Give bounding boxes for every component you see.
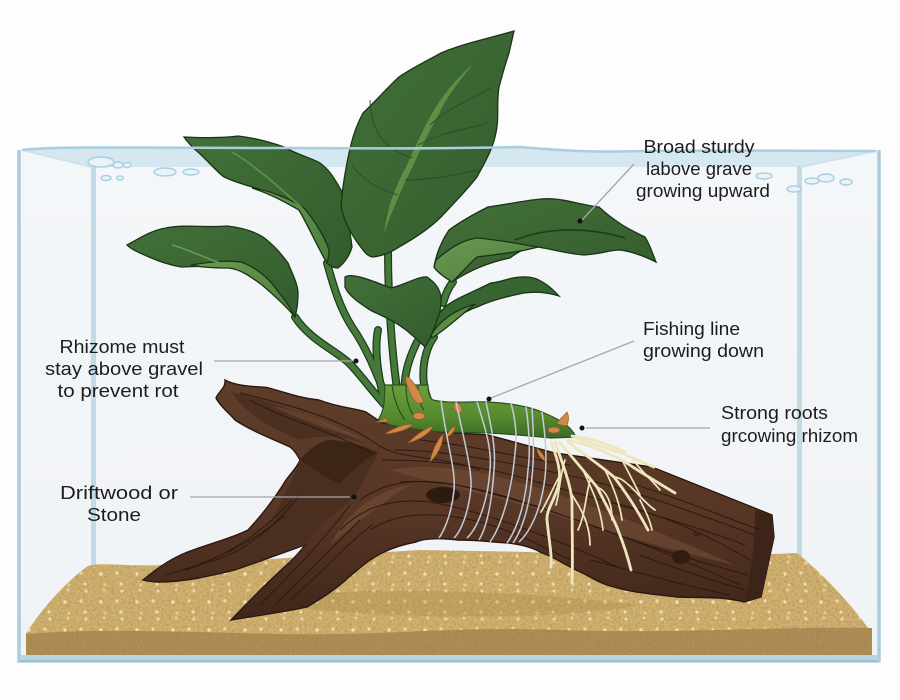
- water surface band: [22, 148, 876, 167]
- label: rhizome: to prevent rot: [58, 380, 178, 401]
- leaf: top large: [341, 31, 514, 257]
- gravel shaded patches: [250, 591, 640, 616]
- label: fishing line: Fishing line: [643, 318, 740, 339]
- driftwood: [143, 380, 774, 620]
- fishing line: [439, 400, 546, 543]
- label: driftwood: [60, 482, 356, 525]
- leaf: right large: [434, 199, 656, 282]
- label: rhizome: stay above gravel: [45, 358, 203, 379]
- bubbles left: [88, 157, 199, 180]
- rhizome: [378, 385, 576, 438]
- tank outer glass: [19, 150, 879, 661]
- label: rhizome: Rhizome must: [60, 336, 184, 357]
- label: rhizome: [45, 336, 358, 401]
- tank bottom rail: [20, 655, 878, 662]
- panel: aquarium tank: [19, 148, 879, 661]
- label: broad sturdy leaves: growing upward: [636, 180, 770, 201]
- wood end grain: [744, 510, 774, 602]
- label: strong roots: Strong roots: [721, 402, 828, 423]
- leader: rhizome: [214, 358, 358, 364]
- leaf: lower centre: [345, 276, 441, 347]
- gravel substrate: [26, 550, 872, 656]
- orange root nubs: [376, 376, 569, 462]
- bubbles right: [756, 173, 852, 192]
- leaf: upper left: [184, 136, 352, 268]
- wood highlights: [270, 405, 735, 565]
- roots: [541, 436, 675, 583]
- leaf: far right small: [431, 277, 559, 338]
- water surface line: [22, 147, 876, 152]
- leader: leaves: [578, 164, 634, 224]
- label: broad sturdy leaves: [578, 136, 770, 224]
- label: strong roots: grcowing rhizom: [721, 425, 858, 446]
- label: broad sturdy leaves: Broad sturdy: [644, 136, 755, 157]
- label: driftwood: Stone: [87, 504, 141, 525]
- leader: roots: [580, 426, 710, 430]
- label: fishing line: growing down: [643, 340, 764, 361]
- leader: driftwood: [190, 494, 356, 500]
- stem lines on base: [392, 385, 424, 420]
- leader: fishing line: [486, 341, 634, 402]
- label: strong roots: [580, 402, 858, 446]
- label: fishing line: [486, 318, 764, 402]
- back frame of tank: [22, 150, 876, 566]
- label: broad sturdy leaves: labove grave: [646, 158, 752, 179]
- plant stems: [295, 250, 453, 416]
- wood crotch shadow: [235, 440, 378, 570]
- label: driftwood: Driftwood or: [60, 482, 178, 503]
- leaf: left lower: [127, 226, 298, 317]
- gravel front band: [26, 628, 872, 656]
- wood grain lines: [165, 393, 760, 605]
